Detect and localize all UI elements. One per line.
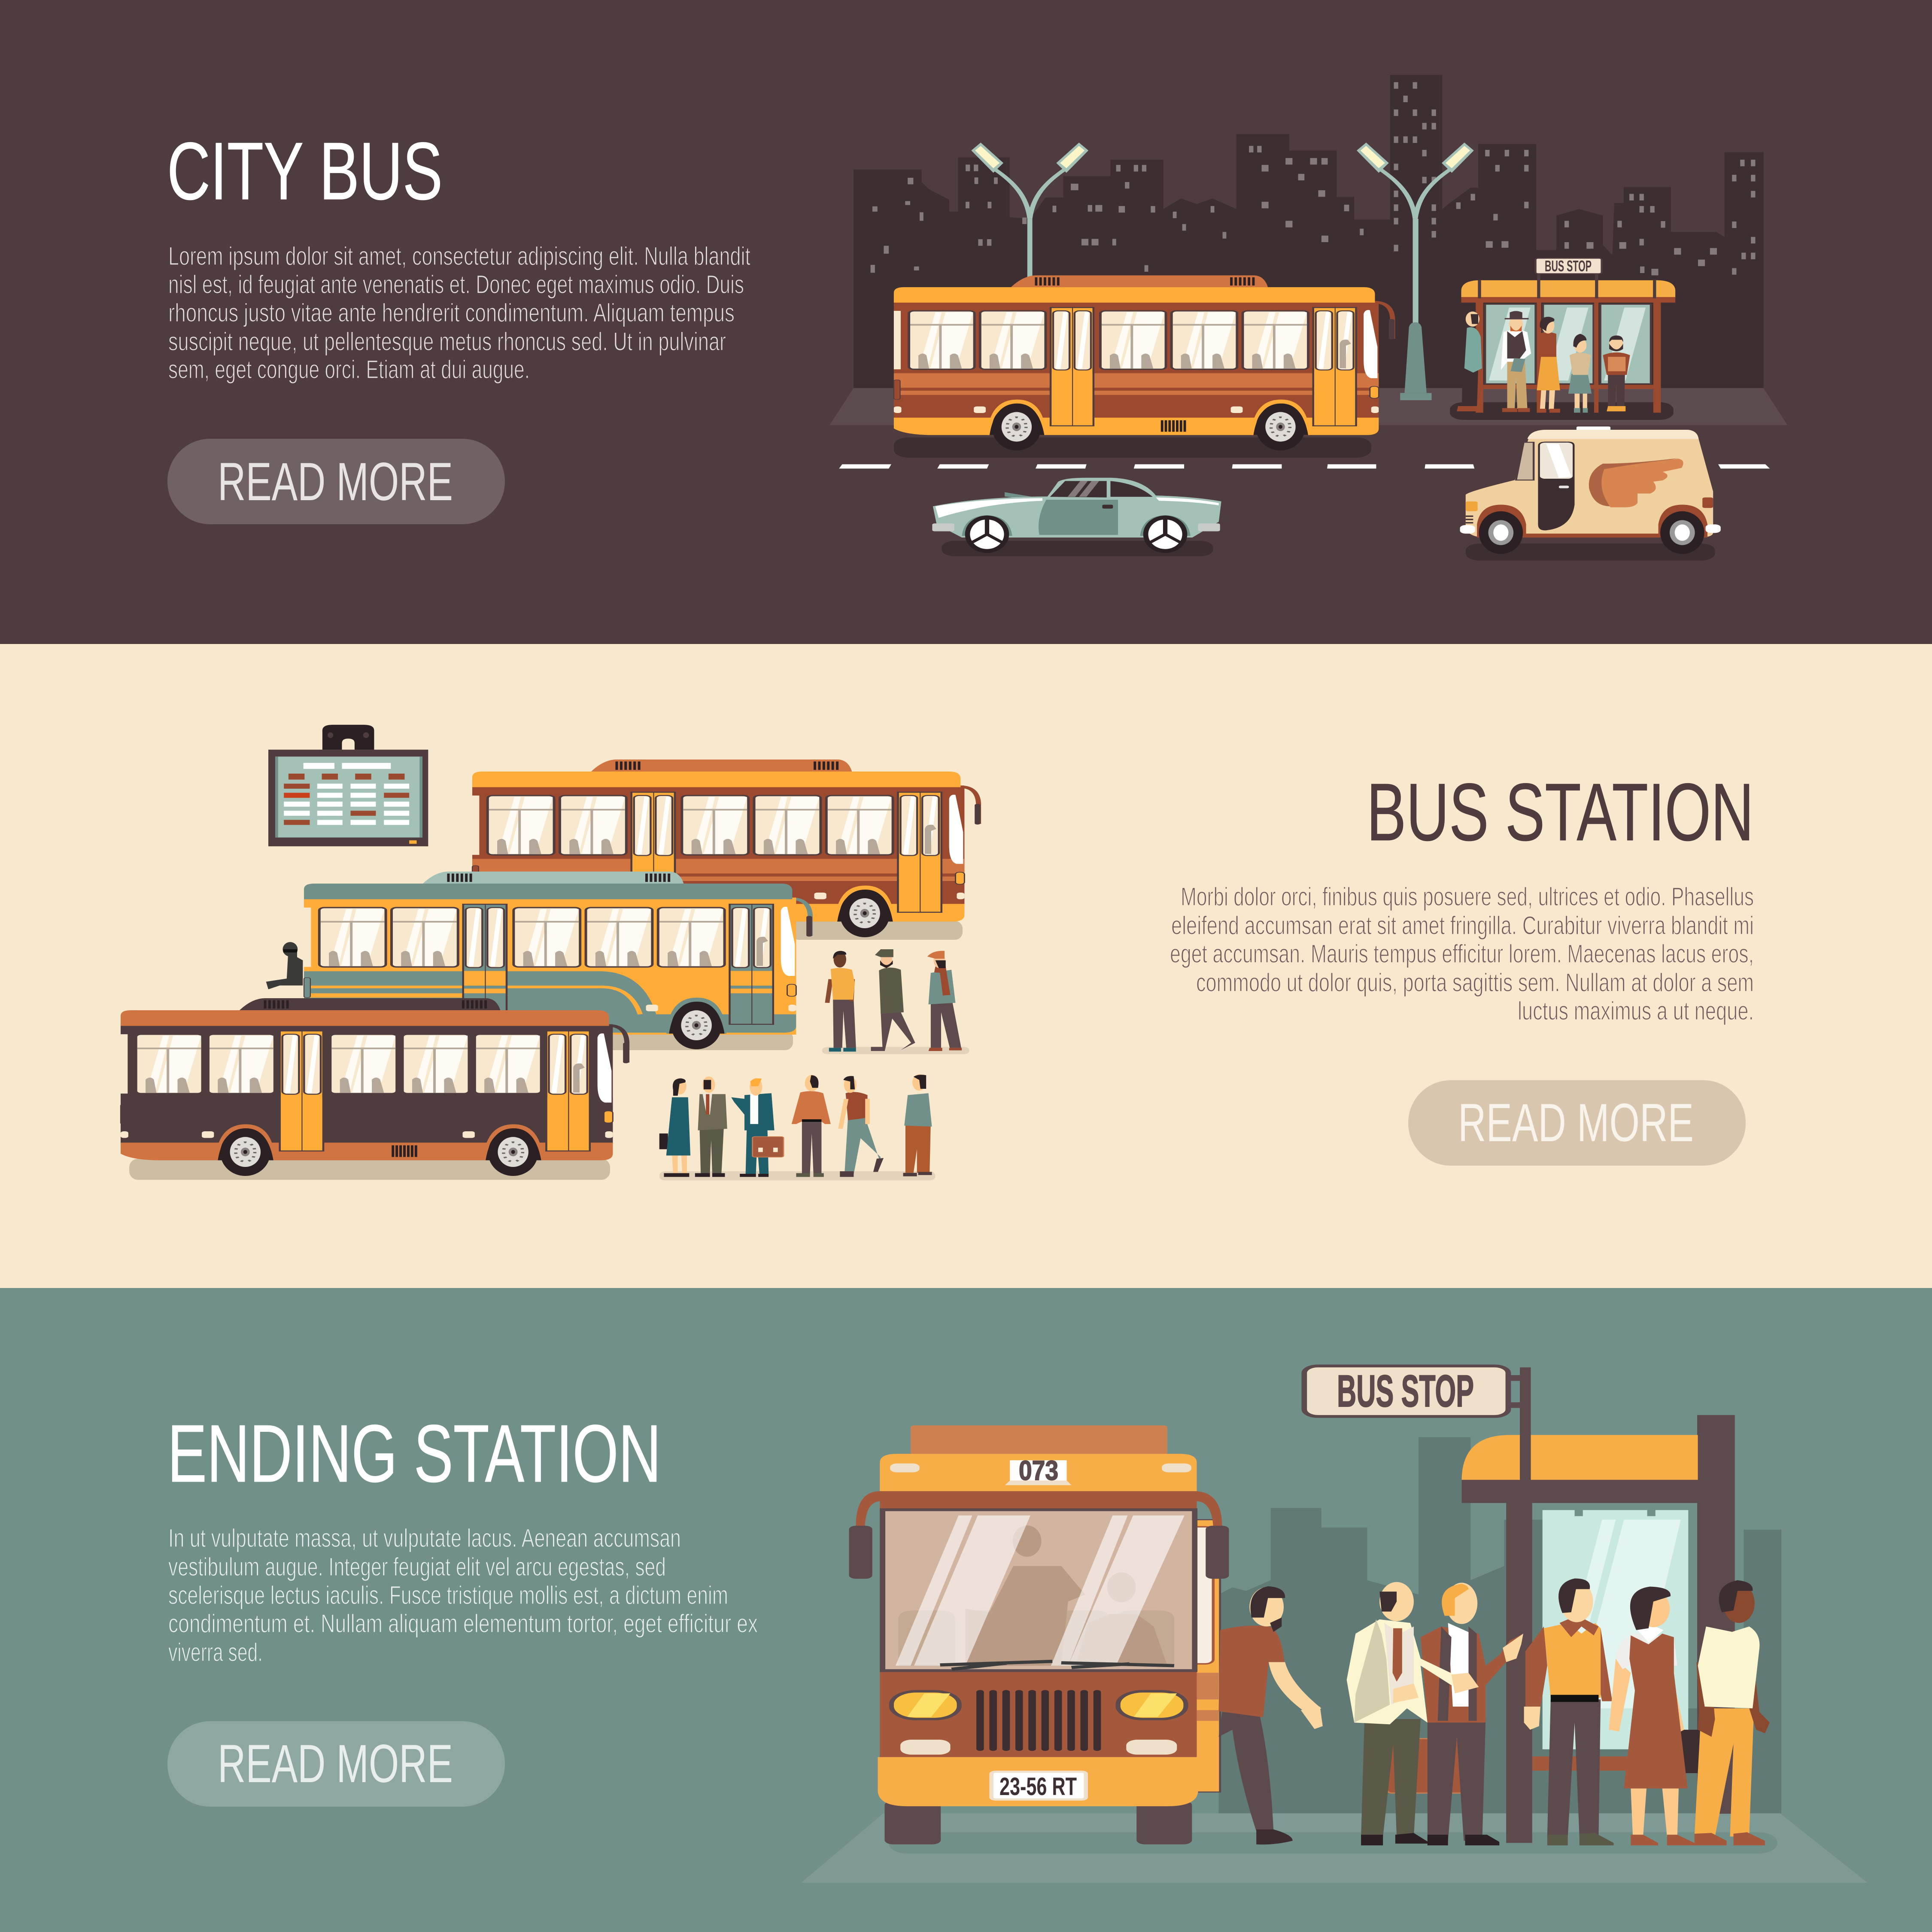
person: man in brown shirt (1219, 1586, 1323, 1844)
licence plate: 23-56 RT (999, 1773, 1077, 1801)
button: read more (167, 439, 505, 524)
street lamp left (971, 143, 1088, 285)
person: woman in yellow skirt (1537, 317, 1560, 413)
text block: city bus: sem, eget congue orci. Etiam at dui augue. (168, 355, 530, 384)
skyline (854, 75, 1764, 388)
text block: city bus: suscipit neque, ut pellentesque metus rhoncus sed. Ut in pulvinar (168, 327, 726, 356)
sign text: bus stop: BUS STOP (1545, 257, 1592, 275)
person: man in teal shirt (1457, 312, 1482, 411)
person: man with briefcase (731, 1078, 784, 1177)
text block: city bus (168, 242, 750, 384)
crowd (659, 949, 969, 1180)
person: man in cream shirt (1695, 1580, 1770, 1845)
ground shadows (659, 1047, 969, 1180)
bus front (849, 1425, 1229, 1844)
title: ending station: ENDING STATION (167, 1408, 661, 1499)
sign text: bus stop: BUS STOP (1337, 1366, 1474, 1416)
text block: ending station: viverra sed. (168, 1638, 263, 1667)
car (932, 478, 1221, 553)
person: man in cream jacket (1347, 1582, 1479, 1845)
bus: teal (304, 872, 812, 1049)
car shadow (942, 541, 1213, 556)
bus shadow (894, 437, 1371, 458)
bus shelter (1304, 1366, 1735, 1843)
shadow (889, 1832, 1777, 1853)
button: read more (167, 1721, 505, 1807)
person: blond man (1421, 1583, 1523, 1845)
person: woman in brown dress (1609, 1587, 1695, 1845)
person: man in olive suit (695, 1076, 727, 1177)
text block: bus station: luctus maximus a ut neque. (1518, 996, 1754, 1025)
person: man in vest (1524, 1578, 1613, 1845)
departure board (268, 725, 428, 846)
text block: bus station (1170, 882, 1754, 1025)
shadow: back bus (791, 921, 963, 940)
button: read more: READ MORE (218, 1734, 453, 1794)
van shadow (1466, 544, 1715, 561)
text block: city bus: Lorem ipsum dolor sit amet, consectetur adipiscing elit. Nulla blandit (168, 242, 750, 270)
panel: ending station (0, 1288, 1932, 1932)
person: man in teal shirt (903, 1074, 932, 1176)
text block: ending station: In ut vulputate massa, ut vulputate lacus. Aenean accumsan (168, 1524, 681, 1552)
illustration: city street (829, 75, 1787, 561)
person: man reading (1603, 335, 1630, 411)
illustration: bus at stop (801, 1366, 1868, 1883)
person: man walking (840, 1076, 884, 1177)
button: read more: READ MORE (1458, 1093, 1694, 1153)
person: masked figure (266, 942, 303, 989)
handbag (1681, 1730, 1705, 1773)
button: read more: READ MORE (218, 452, 453, 512)
text block: ending station: scelerisque lectus iaculis. Fusce tristique mollis est, a dictum enim (168, 1581, 728, 1610)
shadow: front bus (129, 1159, 610, 1180)
shadow: middle bus (601, 1030, 793, 1050)
van (1460, 426, 1721, 554)
title: city bus: CITY BUS (167, 126, 443, 217)
text block: bus station: eleifend accumsan erat sit amet fringilla. Curabitur viverra blandit mi (1171, 911, 1754, 940)
route number: 073 (1019, 1455, 1058, 1486)
text block: bus station: eget accumsan. Mauris tempus efficitur lorem. Maecenas lacus eros, (1170, 939, 1754, 968)
bus: orange (472, 759, 981, 937)
illustration: bus depot (121, 725, 981, 1180)
platform (801, 1814, 1868, 1883)
road dashes (839, 464, 1770, 468)
person: man with hat (1501, 311, 1531, 412)
person: girl (1568, 334, 1592, 413)
text block: ending station (168, 1524, 758, 1667)
person: red cap (927, 951, 962, 1051)
bus stop shelter (1450, 258, 1675, 420)
sidewalk (829, 388, 1787, 425)
skyline (1219, 1437, 1781, 1814)
text block: city bus: nisl est, id feugiat ante venenatis et. Donec eget maximus odio. Duis (168, 270, 744, 299)
text block: ending station: condimentum et. Nullam aliquam elementum tortor, eget efficitur ex (168, 1609, 758, 1638)
text block: city bus: rhoncus justo vitae ante hendrerit condimentum. Aliquam tempus (168, 298, 735, 327)
button: read more (1408, 1080, 1746, 1166)
title: bus station: BUS STATION (1367, 767, 1754, 858)
bus: brown (121, 998, 629, 1176)
person: yellow shirt (827, 951, 856, 1051)
person: green coat (871, 949, 915, 1051)
city bus (894, 275, 1394, 450)
text block: bus station: commodo ut dolor quis, porta sagittis sem. Nullam at dolor a sem (1196, 968, 1754, 997)
street lamp right (1357, 143, 1474, 400)
text block: ending station: vestibulum augue. Integer feugiat elit vel arcu egestas, sed (168, 1552, 666, 1581)
person: man in orange sweater (792, 1075, 831, 1177)
panel: bus station (0, 644, 1932, 1288)
person: woman in teal dress (659, 1078, 690, 1177)
briefcase (1387, 1739, 1467, 1793)
panel: city bus (0, 0, 1932, 644)
